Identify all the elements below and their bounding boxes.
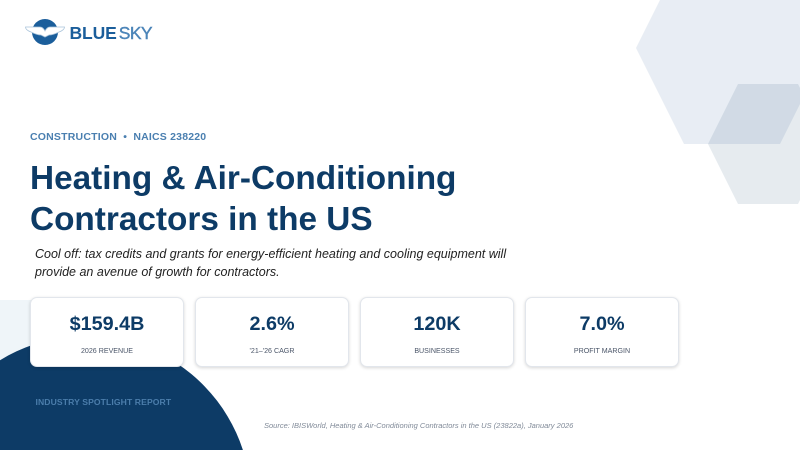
hexagon: large bbox=[636, 0, 800, 144]
stat card: revenue bbox=[30, 297, 184, 367]
navy circle bbox=[0, 336, 243, 450]
subtitle: Cool off: tax credits and grants for energy-efficient heating and cooling equipment will bbox=[35, 247, 506, 261]
profit margin value: 7.0% bbox=[579, 313, 625, 335]
logo wordmark: BLUESKY bbox=[70, 23, 152, 43]
revenue value: $159.4B bbox=[70, 313, 144, 335]
title bbox=[30, 160, 456, 238]
CAGR value: 2.6% bbox=[249, 313, 295, 335]
CAGR label: '21–'26 CAGR bbox=[250, 347, 294, 355]
profit margin label: PROFIT MARGIN bbox=[574, 347, 630, 355]
stat card: businesses bbox=[360, 297, 514, 367]
pale panel bbox=[0, 300, 60, 365]
source note: Source: IBISWorld, Heating & Air-Conditioning Contractors in the US (23822a), January 2026 bbox=[264, 421, 573, 430]
revenue label: 2026 REVENUE bbox=[81, 347, 133, 355]
icon: winged globe bbox=[25, 19, 65, 45]
title: Contractors in the US bbox=[30, 201, 373, 238]
subtitle: provide an avenue of growth for contractors. bbox=[35, 265, 280, 279]
businesses label: BUSINESSES bbox=[414, 347, 460, 355]
report label: INDUSTRY SPOTLIGHT REPORT bbox=[36, 397, 171, 407]
businesses value: 120K bbox=[413, 313, 461, 335]
eyebrow: sector and NAICS: CONSTRUCTION • NAICS 238220 bbox=[30, 131, 206, 143]
hexagon: small bbox=[708, 84, 800, 204]
stat card: CAGR bbox=[195, 297, 349, 367]
logo bbox=[25, 19, 152, 45]
stat card: profit margin bbox=[525, 297, 679, 367]
subtitle bbox=[34, 247, 506, 279]
title: Heating & Air-Conditioning bbox=[30, 160, 456, 197]
